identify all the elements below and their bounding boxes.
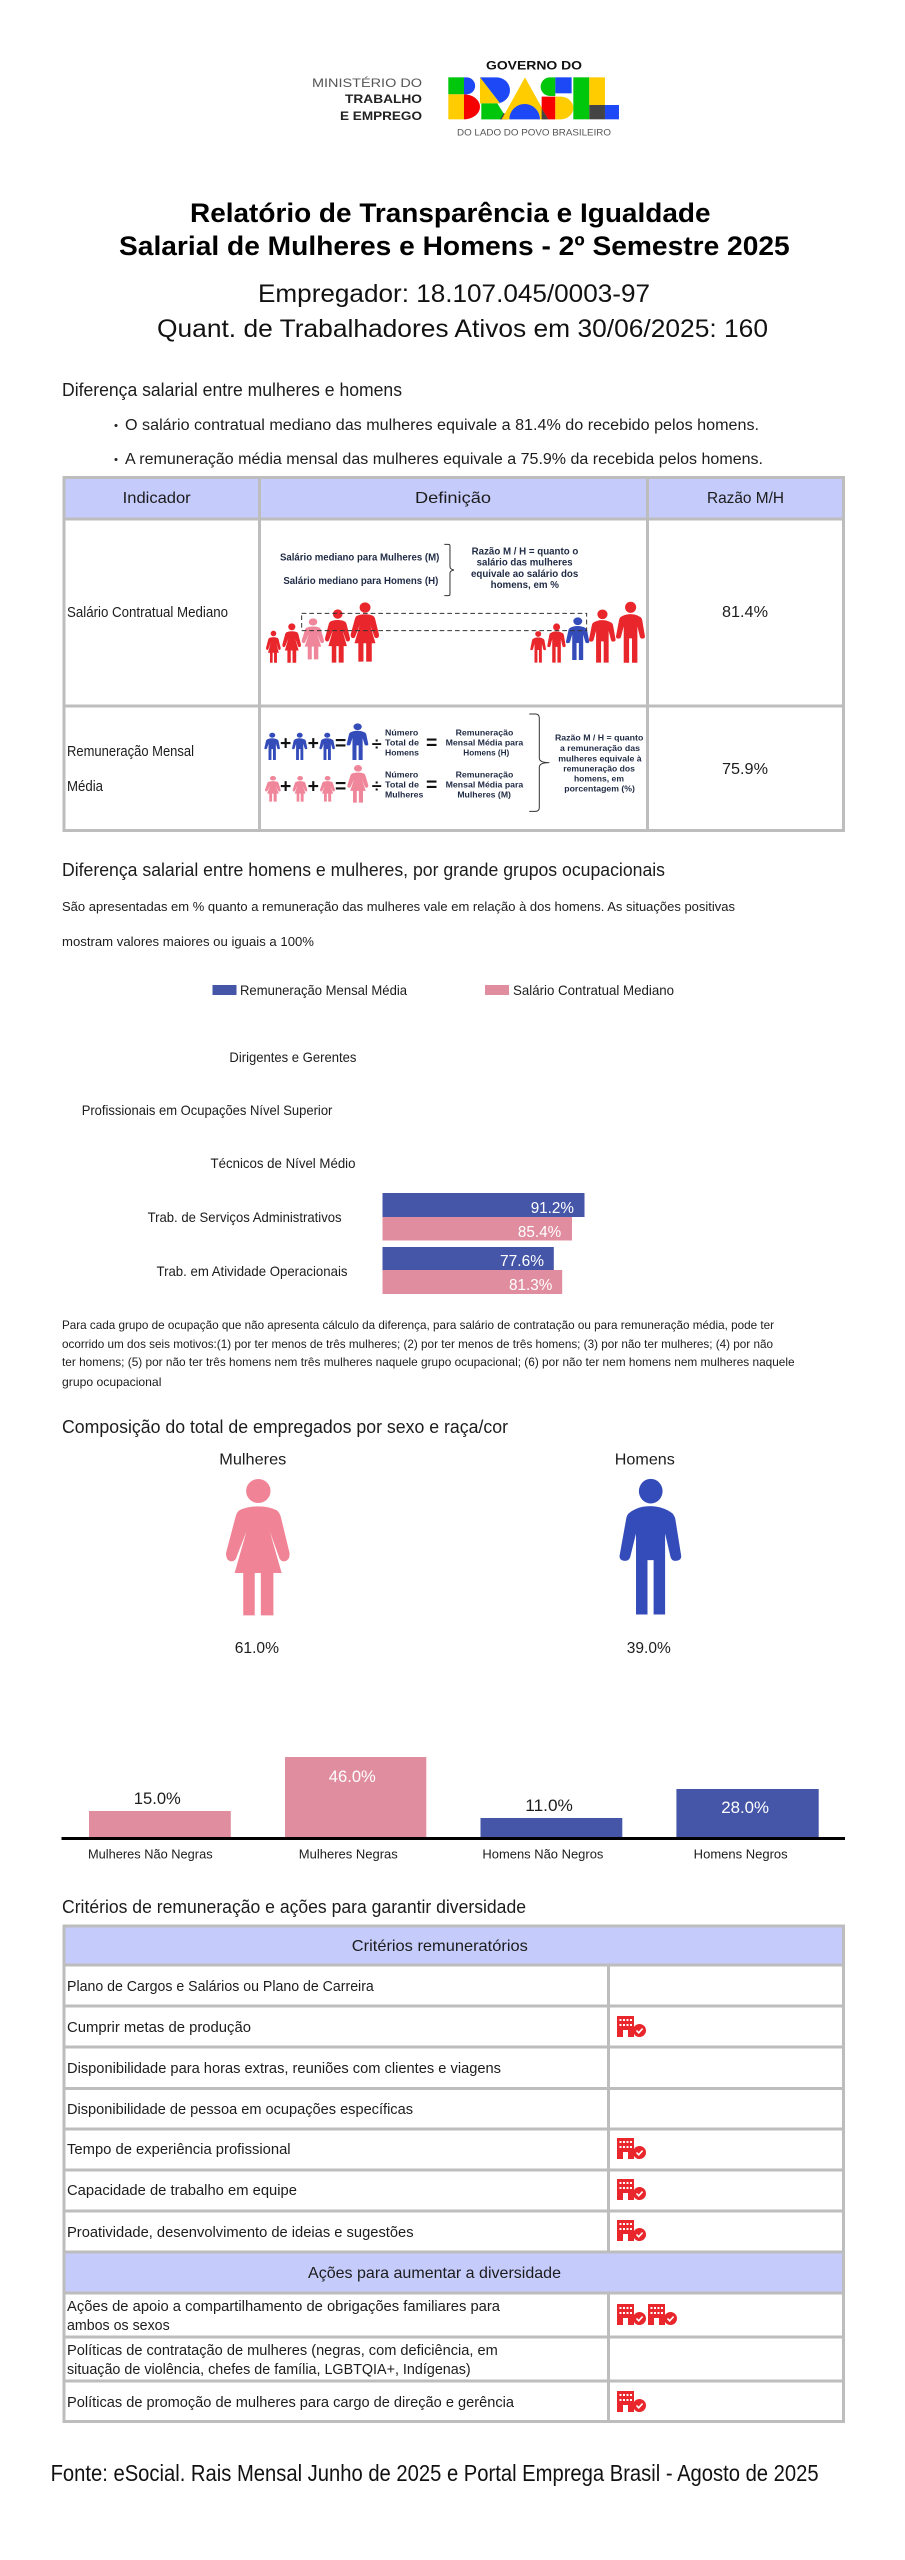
diagram: average pay: Número — [385, 727, 418, 737]
row: contractual median salary: Salário Contratual Mediano — [67, 604, 228, 621]
text block: footnote on missing data: grupo ocupacional — [62, 1375, 161, 1389]
diagram: average pay: Total de — [385, 780, 419, 790]
criterion: professional experience: Tempo de experiência profissional — [67, 2141, 291, 2158]
bar: Homens Não Negros: Homens Não Negros — [482, 1846, 604, 1862]
table header: Indicador — [123, 490, 191, 507]
row: average monthly pay: Remuneração Mensal — [67, 743, 194, 760]
table header: Definição — [415, 490, 491, 507]
logo: Ministério do Trabalho e Emprego: TRABALHO — [345, 94, 422, 106]
diagram: median salary: Razão M / H = quanto o — [472, 546, 578, 557]
section header: pay criteria: Critérios remuneratórios — [352, 1938, 528, 1955]
diagram: average pay: porcentagem (%) — [564, 784, 635, 794]
criterion: teamwork — [67, 2179, 646, 2200]
diagram: average pay: = — [335, 734, 346, 755]
text block: chart explanation: São apresentadas em % quanto a remuneração das mulheres vale em relação à dos homens. As situações positivas — [62, 899, 735, 914]
bars: administrative services — [382, 1193, 584, 1241]
bullet list: salary summary — [114, 417, 763, 468]
icon: woman — [226, 1479, 290, 1615]
action: hiring women — [67, 2342, 498, 2378]
row: contractual median salary: 81.4% — [722, 604, 768, 621]
bar: Homens Negros: 28.0% — [721, 1798, 769, 1817]
logo: Governo do Brasil: GOVERNO DO — [486, 60, 582, 72]
source note: Fonte: eSocial. Rais Mensal Junho de 2025 e Portal Emprega Brasil - Agosto de 2025 — [51, 2460, 819, 2486]
category labels — [82, 1049, 356, 1279]
logo: Ministério do Trabalho e Emprego: E EMPREGO — [340, 111, 422, 123]
panel: men share: Homens — [615, 1452, 675, 1468]
action: family obligations: Ações de apoio a compartilhamento de obrigações familiares para — [67, 2298, 501, 2315]
row: average monthly pay: 75.9% — [722, 761, 768, 778]
chart legend — [212, 982, 674, 998]
row: average monthly pay: Média — [67, 778, 104, 795]
category labels: Trab. em Atividade Operacionais — [156, 1263, 348, 1279]
chart legend: Salário Contratual Mediano — [513, 982, 674, 998]
text block: footnote on missing data: ocorrido um dos seis motivos:(1) por ter menos de três mulheres; (2) por ter menos de três homens; (3) por não ter mulheres; (4) por não — [62, 1337, 773, 1351]
diagram: average pay: Razão M / H = quanto — [555, 733, 643, 743]
action: promoting women — [67, 2391, 646, 2412]
diagram: average pay: = — [426, 775, 437, 796]
diagram: average pay: Remuneração — [456, 727, 513, 737]
diagram: average pay: ÷ — [372, 734, 382, 754]
diagram: median salary — [266, 544, 645, 663]
diagram: average pay: Total de — [385, 738, 419, 748]
logo: Ministério do Trabalho e Emprego: MINISTÉRIO DO — [312, 77, 422, 90]
panel: women share: 61.0% — [235, 1640, 279, 1657]
criterion: proactivity: Proatividade, desenvolvimento de ideias e sugestões — [67, 2224, 414, 2241]
bar: Mulheres Negras: 46.0% — [329, 1767, 376, 1786]
category labels: Profissionais em Ocupações Nível Superior — [82, 1102, 333, 1118]
criterion: career plan: Plano de Cargos e Salários ou Plano de Carreira — [67, 1978, 374, 1995]
title — [119, 198, 790, 261]
section header: diversity actions: Ações para aumentar a diversidade — [308, 2265, 561, 2282]
diagram: average pay: = — [426, 733, 437, 754]
diagram: average pay: Mulheres — [385, 790, 424, 800]
title: Relatório de Transparência e Igualdade — [190, 198, 710, 228]
action: family obligations — [67, 2298, 677, 2334]
criterion: professional experience — [67, 2138, 646, 2159]
criterion: overtime availability: Disponibilidade para horas extras, reuniões com clientes e viagens — [67, 2060, 501, 2077]
employer identification — [157, 280, 768, 343]
employer identification: Quant. de Trabalhadores Ativos em 30/06/2025: 160 — [157, 315, 768, 343]
bar: Mulheres Negras: Mulheres Negras — [299, 1846, 398, 1862]
bullet list: salary summary: O salário contratual mediano das mulheres equivale a 81.4% do recebido pelos homens. — [125, 417, 759, 434]
bar: Mulheres Negras — [285, 1757, 426, 1862]
bar chart: sex and race composition — [62, 1757, 845, 1862]
heading: workforce composition: Composição do total de empregados por sexo e raça/cor — [62, 1417, 508, 1437]
bar: Mulheres Não Negras: Mulheres Não Negras — [88, 1846, 213, 1862]
logo: Ministério do Trabalho e Emprego — [312, 77, 422, 123]
table header: Razão M/H — [707, 490, 784, 507]
action: promoting women: Políticas de promoção de mulheres para cargo de direção e gerência — [67, 2394, 515, 2411]
bars: operational activities: 77.6% — [500, 1253, 544, 1270]
diagram: average pay: remuneração dos — [563, 764, 635, 774]
panel: men share — [615, 1452, 681, 1657]
panel: criteria and diversity table — [64, 1926, 844, 2422]
action: hiring women: Políticas de contratação de mulheres (negras, com deficiência, em — [67, 2342, 498, 2359]
icon: man — [620, 1479, 681, 1614]
action: family obligations: ambos os sexos — [67, 2317, 170, 2334]
text block: footnote on missing data — [62, 1318, 795, 1389]
diagram: average pay: Número — [385, 770, 418, 780]
bar: Homens Negros — [676, 1789, 819, 1862]
criterion: production targets: Cumprir metas de produção — [67, 2019, 251, 2036]
bars: operational activities — [382, 1247, 562, 1294]
diagram: median salary: Salário mediano para Mulheres (M) — [280, 553, 439, 564]
diagram: average pay: homens, em — [574, 774, 624, 784]
diagram: median salary: salário das mulheres — [477, 558, 573, 569]
diagram: median salary: Salário mediano para Homens (H) — [283, 576, 438, 587]
text block: chart explanation: mostram valores maiores ou iguais a 100% — [62, 934, 314, 949]
bar: Homens Não Negros: 11.0% — [525, 1796, 573, 1815]
row: contractual median salary — [67, 604, 768, 621]
row: average monthly pay — [67, 743, 768, 795]
diagram: average pay: Mensal Média para — [446, 738, 524, 748]
bars: administrative services: 91.2% — [531, 1200, 574, 1217]
criterion: production targets — [67, 2016, 646, 2037]
diagram: median salary: homens, em % — [491, 580, 559, 591]
criterion: proactivity — [67, 2220, 646, 2241]
diagram: average pay — [264, 714, 643, 811]
diagram: average pay: Mensal Média para — [446, 780, 524, 790]
bar: Mulheres Não Negras — [88, 1789, 231, 1862]
diagram: average pay: Remuneração — [456, 770, 513, 780]
panel: women share — [219, 1452, 290, 1657]
heading: salary difference: Diferença salarial entre mulheres e homens — [62, 380, 402, 400]
bar: Mulheres Não Negras: 15.0% — [134, 1789, 181, 1808]
chart legend: Remuneração Mensal Média — [240, 982, 407, 998]
employer identification: Empregador: 18.107.045/0003-97 — [258, 280, 650, 308]
category labels: Trab. de Serviços Administrativos — [148, 1209, 342, 1225]
logo: Governo do Brasil — [448, 60, 619, 138]
criterion: specific occupations availability: Disponibilidade de pessoa em ocupações específicas — [67, 2101, 413, 2118]
bars: administrative services: 85.4% — [518, 1224, 561, 1241]
panel: women share: Mulheres — [219, 1452, 286, 1468]
diagram: average pay: + — [308, 776, 319, 797]
diagram: average pay: + — [280, 734, 291, 755]
panel: men share: 39.0% — [627, 1640, 671, 1657]
diagram: average pay: Mulheres (M) — [457, 790, 511, 800]
diagram: average pay: ÷ — [372, 776, 382, 796]
criterion: teamwork: Capacidade de trabalho em equipe — [67, 2182, 297, 2199]
logo: Governo do Brasil: DO LADO DO POVO BRASILEIRO — [457, 128, 611, 138]
diagram: average pay: a remuneração das — [560, 743, 640, 753]
diagram: average pay: + — [308, 734, 319, 755]
bar chart: pay ratio by occupational group — [82, 1049, 584, 1294]
heading: occupational groups: Diferença salarial entre homens e mulheres, por grande grupos ocupacionais — [62, 860, 665, 880]
diagram: median salary: equivale ao salário dos — [471, 569, 579, 580]
heading: criteria and actions: Critérios de remuneração e ações para garantir diversidade — [62, 1897, 526, 1917]
category labels: Dirigentes e Gerentes — [229, 1049, 356, 1065]
bars: operational activities: 81.3% — [509, 1277, 552, 1294]
diagram: average pay: + — [280, 776, 291, 797]
diagram: average pay: = — [335, 776, 346, 797]
diagram: average pay: Homens — [385, 748, 419, 758]
diagram: average pay: Homens (H) — [463, 748, 510, 758]
action: hiring women: situação de violência, chefes de família, LGBTQIA+, Indígenas) — [67, 2361, 471, 2378]
category labels: Técnicos de Nível Médio — [210, 1155, 356, 1171]
bar: Homens Negros: Homens Negros — [694, 1846, 788, 1862]
bar: Homens Não Negros — [480, 1796, 622, 1862]
title: Salarial de Mulheres e Homens - 2º Semestre 2025 — [119, 231, 790, 261]
text block: footnote on missing data: ter homens; (5) por não ter três homens nem três mulheres naquele grupo ocupacional; (6) por não ter nem homens nem mulheres naquele — [62, 1355, 795, 1369]
text block: footnote on missing data: Para cada grupo de ocupação que não apresenta cálculo da diferença, para salário de contratação ou para remuneração média, pode ter — [62, 1318, 774, 1332]
text block: chart explanation — [62, 899, 735, 949]
panel: indicator table — [64, 478, 844, 830]
diagram: average pay: mulheres equivale à — [558, 753, 642, 763]
table header — [123, 490, 784, 507]
bullet list: salary summary: A remuneração média mensal das mulheres equivale a 75.9% da recebida pelos homens. — [125, 451, 763, 468]
